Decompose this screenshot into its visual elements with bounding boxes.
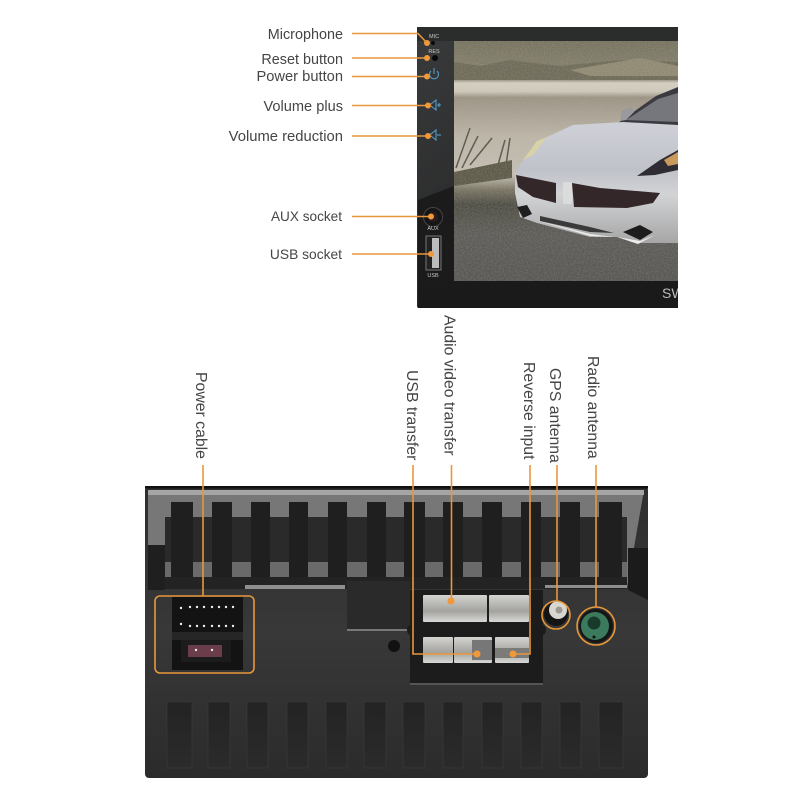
- mirror: [620, 107, 634, 121]
- GPS antenna socket: [544, 601, 568, 626]
- headlights: [523, 137, 547, 160]
- front callout: Reset button: [261, 52, 430, 68]
- connector block: [410, 590, 543, 685]
- mount holes: [388, 640, 400, 652]
- car body: [515, 122, 678, 243]
- front callout: AUX socket: AUX socket: [271, 209, 342, 224]
- front callout: Power button: [256, 69, 430, 85]
- microphone hole: MIC: [429, 34, 439, 40]
- front callout: Volume plus: Volume plus: [263, 99, 343, 115]
- radio antenna socket: [579, 609, 613, 643]
- rear callout: Reverse input: [510, 362, 537, 658]
- front callout: Microphone: Microphone: [268, 27, 343, 43]
- model text: SW: [662, 285, 685, 301]
- grille left: [516, 175, 556, 203]
- top light band: [148, 490, 644, 588]
- rear callout: Power cable: [155, 372, 254, 673]
- front callout: USB socket: [270, 247, 434, 262]
- rear callout: USB transfer: USB transfer: [403, 370, 420, 460]
- icon: volume plus: [428, 100, 441, 110]
- front callout: Volume reduction: Volume reduction: [229, 129, 343, 145]
- recess: [347, 581, 410, 631]
- rear callout: Radio antenna: [577, 356, 615, 645]
- hills: [454, 60, 678, 80]
- rear callout: Audio video transfer: Audio video transfer: [440, 315, 458, 456]
- front callout: Volume plus: [263, 99, 431, 115]
- rear callout: Reverse input: Reverse input: [520, 362, 537, 460]
- grasses: [456, 128, 510, 168]
- screen with car photo: [454, 41, 678, 281]
- rear view of head unit: [145, 486, 648, 778]
- lower fins: [167, 702, 623, 768]
- power connector: [172, 597, 243, 670]
- windshield: [618, 87, 678, 126]
- ledge strip: [245, 585, 345, 589]
- rear callout: Radio antenna: Radio antenna: [584, 356, 601, 459]
- front callout: Volume reduction: [229, 129, 431, 145]
- USB socket: [426, 236, 441, 279]
- badge: [563, 182, 572, 204]
- rear callout: GPS antenna: GPS antenna: [546, 368, 563, 463]
- microphone hole: [429, 34, 439, 45]
- front panel of head unit: [417, 27, 688, 308]
- icon: volume minus: [428, 130, 441, 140]
- grille right: [572, 183, 660, 208]
- icon: power: [429, 68, 439, 79]
- rear callout: Power cable: Power cable: [192, 372, 209, 459]
- USB socket: USB: [427, 273, 439, 279]
- rear callout: GPS antenna: [542, 368, 570, 629]
- rear callout: USB transfer: [403, 370, 480, 658]
- front callout: Microphone: [268, 27, 430, 46]
- front callout: AUX socket: [271, 209, 434, 224]
- lower intakes: [517, 205, 532, 218]
- AUX socket: AUX: [427, 226, 439, 232]
- upper fins: [171, 502, 622, 577]
- front callout: Power button: Power button: [256, 69, 343, 85]
- front callout: Reset button: Reset button: [261, 52, 343, 68]
- reset hole: [428, 49, 440, 61]
- front callout: USB socket: USB socket: [270, 247, 342, 262]
- rear callout: Audio video transfer: [440, 315, 458, 604]
- reset hole: RES: [428, 49, 440, 55]
- AUX socket: [424, 208, 442, 232]
